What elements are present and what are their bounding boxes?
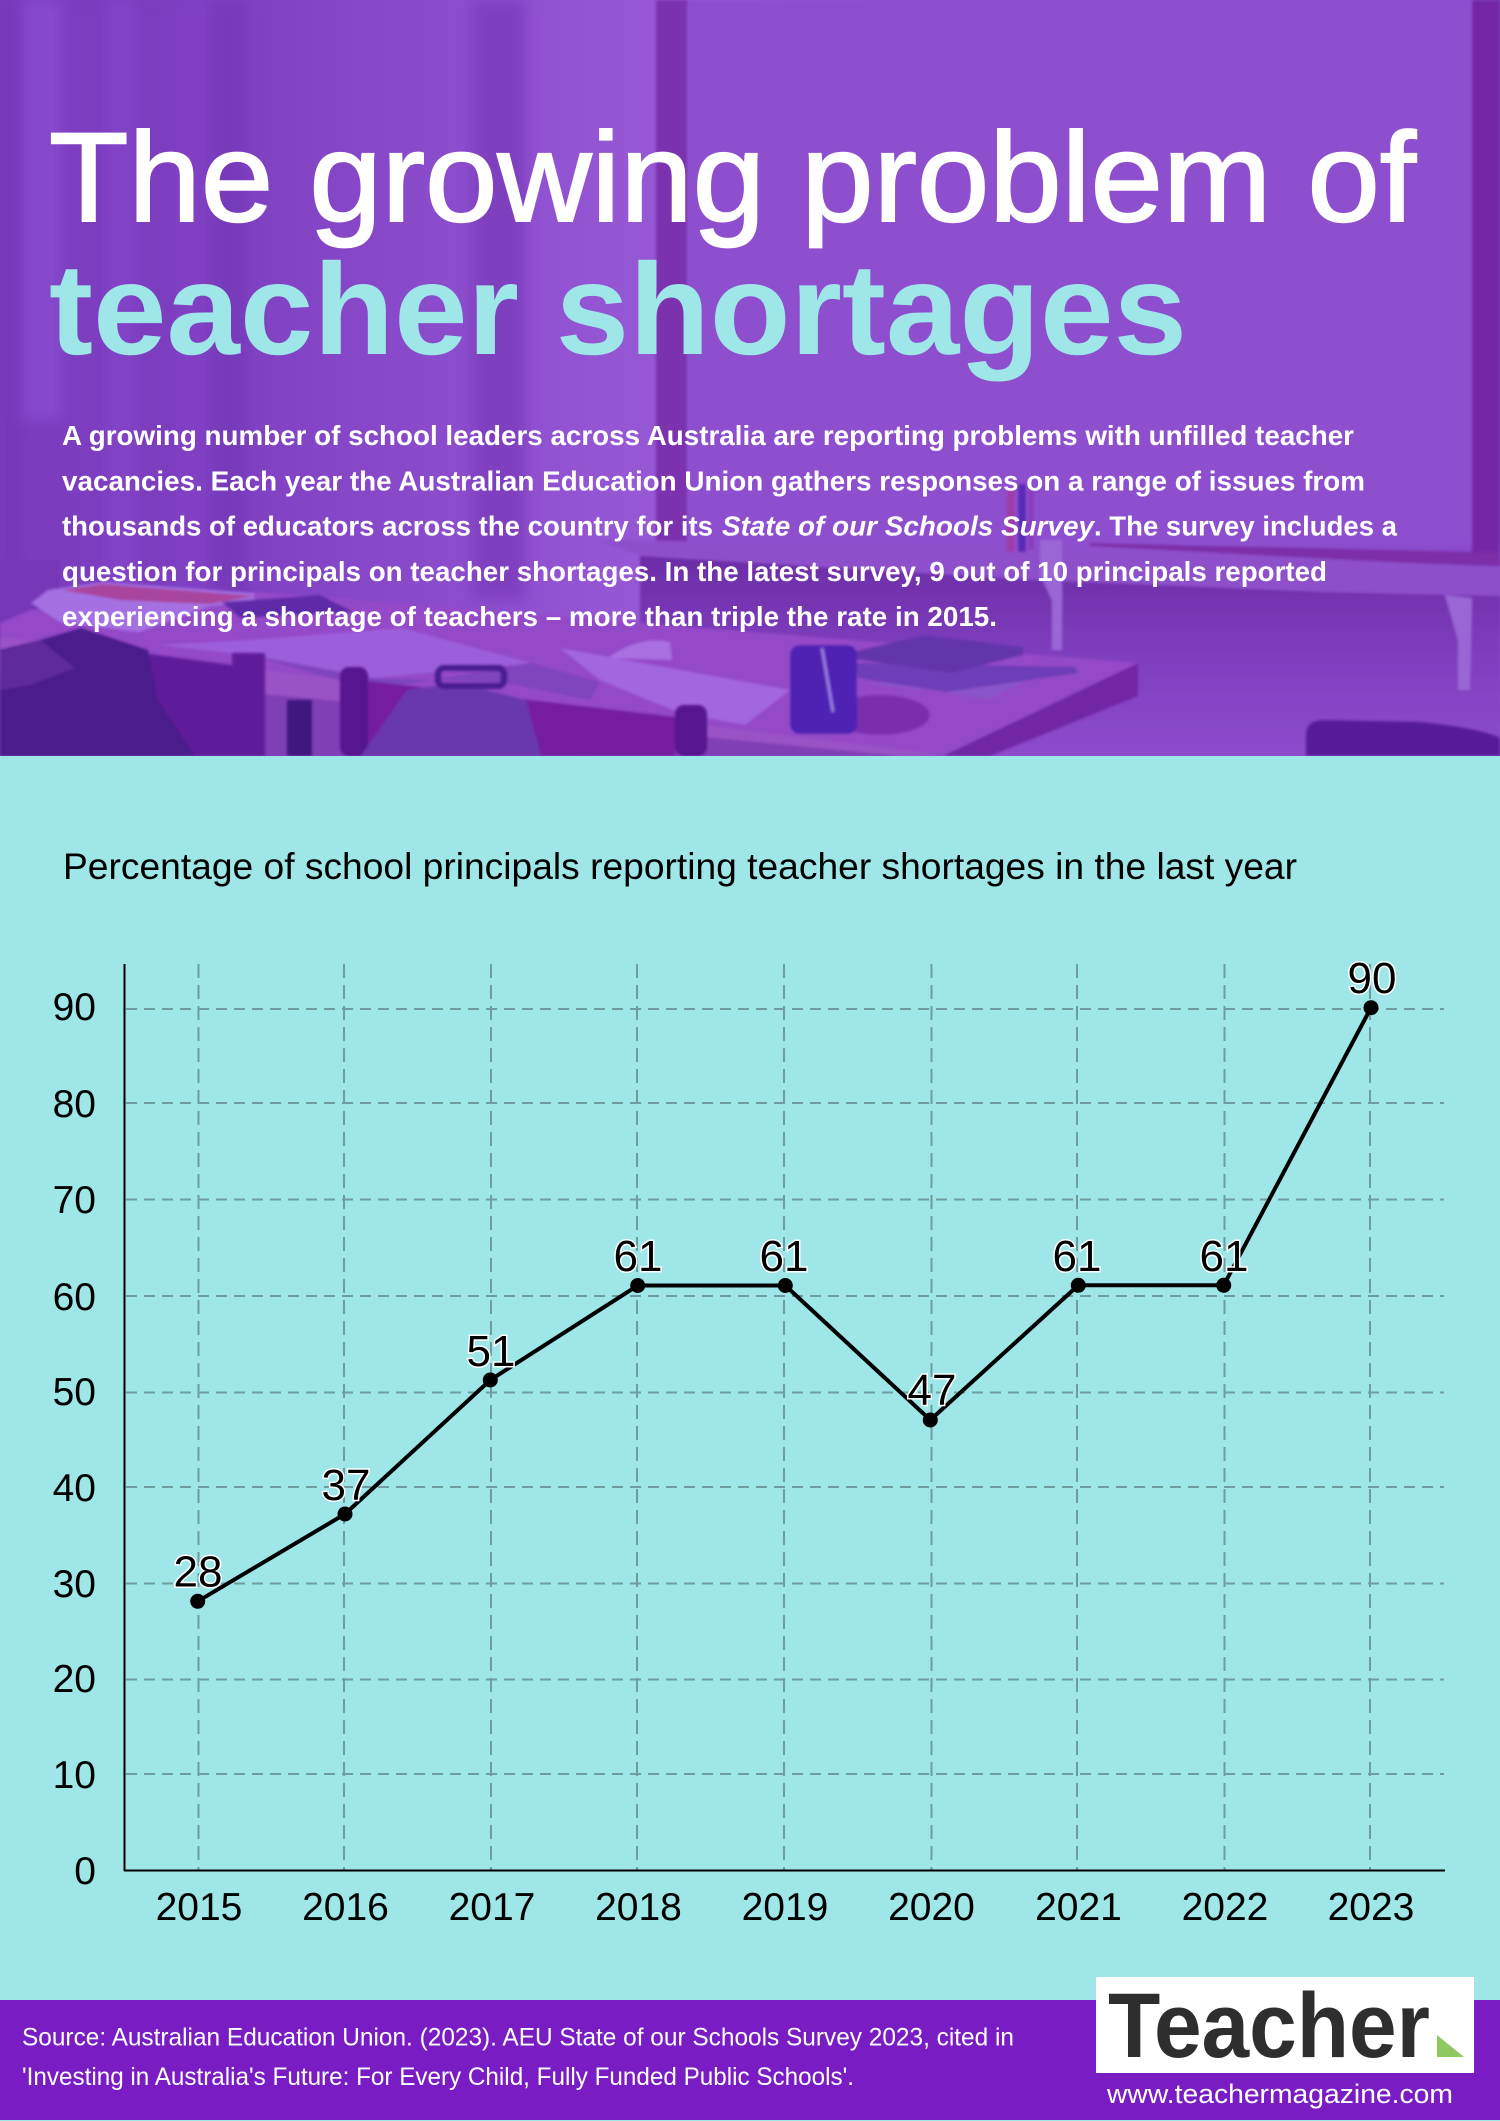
window frame and pane [595,0,1500,756]
data labels: 61 [614,1232,662,1281]
desk front side [0,637,943,756]
x axis labels: 2023 [1328,1886,1414,1929]
wall under shelf [640,556,1500,756]
books left [31,582,254,632]
x axis labels [156,1886,1414,1929]
data line [198,1008,1371,1601]
pens [1007,490,1015,552]
data points [190,1000,1379,1609]
intro paragraph: vacancies. Each year the Australian Education Union gathers responses on a range of issues from [62,466,1365,496]
line chart [53,954,1445,1929]
vertical gridlines [198,964,1370,1870]
data labels: 47 [908,1366,956,1415]
intro paragraph: . The survey includes a [1094,510,1397,542]
title [49,106,1417,382]
title line 2: teacher shortages [49,236,1187,382]
desk shadow [854,694,930,736]
x axis labels: 2017 [449,1886,535,1929]
y axis labels: 90 [53,986,96,1029]
x axis labels: 2018 [595,1886,682,1929]
pencil case [790,645,857,734]
intro paragraph: thousands of educators across the country for its [62,510,713,542]
chart title: Percentage of school principals reporting teacher shortages in the last year [63,846,1297,887]
backpack one [0,628,195,756]
data labels: 28 [174,1548,222,1596]
x axis labels: 2020 [888,1886,975,1929]
floor beneath desk [266,694,886,756]
y axis labels: 40 [53,1467,96,1510]
chairs and bags [0,628,1500,756]
data labels: 51 [467,1327,515,1376]
website url: www.teachermagazine.com [1106,2079,1453,2109]
data labels: 61 [1200,1232,1248,1281]
shelf [595,540,1500,596]
open papers [560,648,790,725]
y axis labels: 70 [53,1179,96,1222]
chair one [148,652,266,756]
data labels: 61 [760,1232,808,1281]
y axis labels: 60 [53,1276,96,1319]
backpack two [361,683,541,756]
source note [22,2024,1014,2091]
intro paragraph [62,420,1397,632]
curtains [24,0,527,601]
panel: footer band [0,2000,1500,2120]
chair two [359,680,675,756]
left wall behind desk [0,560,60,630]
axes [124,964,1445,1871]
y axis labels: 0 [74,1850,96,1893]
y axis labels: 30 [53,1563,96,1606]
notebook stack [884,682,1018,699]
x axis labels: 2021 [1035,1886,1122,1929]
x axis labels: 2022 [1182,1886,1268,1929]
intro paragraph: experiencing a shortage of teachers – more than triple the rate in 2015. [62,601,997,632]
white cap shape [608,640,672,660]
desk [0,582,1138,756]
data labels: 61 [1053,1232,1101,1281]
desk top [0,592,1138,755]
x axis labels: 2016 [302,1886,389,1929]
y axis labels: 20 [53,1658,96,1701]
panel: hero photo background [0,0,1500,756]
open book [158,628,531,678]
title line 1: The growing problem of [49,106,1417,248]
panel: chart background [0,756,1500,2000]
wall brackets [1040,540,1062,650]
logo: Teacher: Teacher [1108,1975,1430,2077]
right stool [1306,720,1500,756]
desk right side [943,663,1138,756]
y axis labels: 80 [53,1083,96,1126]
icon: green triangle [1437,2035,1464,2057]
x axis labels: 2015 [156,1886,242,1929]
intro paragraph: question for principals on teacher shortages. In the latest survey, 9 out of 10 principals reported [62,556,1327,587]
data labels: 90 [1348,954,1396,1003]
source note: Source: Australian Education Union. (2023). AEU State of our Schools Survey 2023, cited in [22,2024,1014,2052]
data labels [174,954,1396,1596]
intro paragraph: State of our Schools Survey [722,510,1095,542]
intro paragraph: A growing number of school leaders across Australia are reporting problems with unfilled teacher [62,420,1354,451]
y axis labels [53,986,96,1893]
y axis labels: 50 [53,1371,96,1414]
source note: 'Investing in Australia's Future: For Every Child, Fully Funded Public Schools'. [22,2063,854,2091]
x axis labels: 2019 [742,1886,828,1929]
y axis labels: 10 [53,1754,96,1797]
data labels: 37 [322,1461,370,1510]
horizontal gridlines [126,1009,1444,1774]
